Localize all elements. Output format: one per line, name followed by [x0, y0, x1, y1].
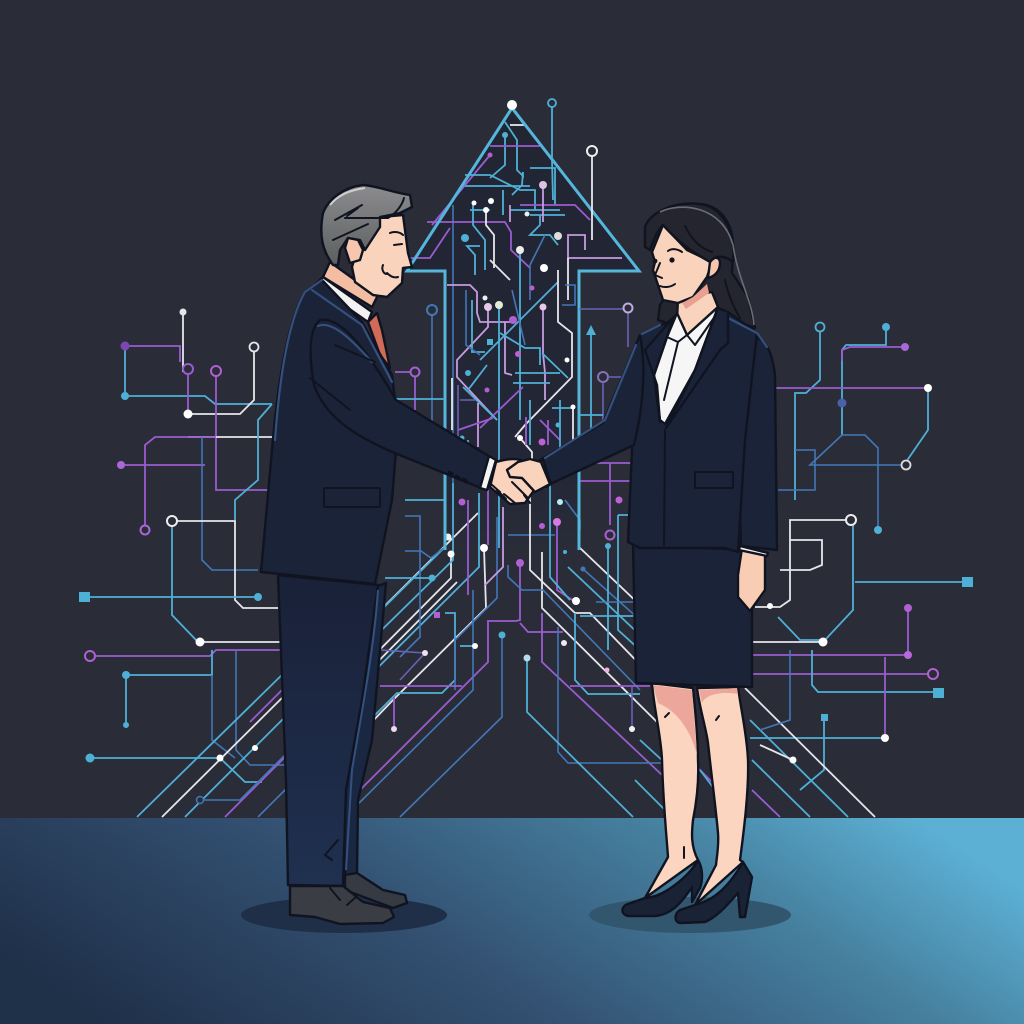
arrow interior fill	[408, 108, 638, 552]
man: back shoe	[345, 873, 407, 908]
man: pocket	[324, 488, 380, 507]
man: jacket	[261, 280, 398, 584]
woman: cuff left	[538, 460, 551, 487]
woman: face	[652, 225, 712, 303]
shadow: man	[241, 897, 447, 933]
man: trousers	[278, 575, 378, 886]
woman: left shoe	[622, 860, 702, 916]
floor	[0, 818, 1024, 1024]
nodes around the arrow	[395, 99, 632, 432]
man: tie	[368, 313, 390, 368]
man: sleeve	[311, 320, 492, 488]
man: front shoe	[290, 886, 394, 924]
woman: jacket	[628, 312, 757, 552]
circuit network: left side	[84, 312, 290, 817]
circuit nodes: left side	[79, 308, 262, 804]
woman: leg shadows	[653, 685, 738, 755]
woman: ear	[708, 258, 720, 278]
woman: skirt	[633, 545, 752, 687]
circuit network: lower chevrons	[290, 463, 720, 817]
woman: left leg	[645, 683, 698, 898]
woman: front hair	[645, 204, 733, 262]
arrow outline	[407, 108, 639, 550]
woman: left lapel	[645, 318, 673, 422]
figure: woman	[538, 204, 777, 923]
man: ear	[345, 238, 363, 263]
handshake	[490, 459, 550, 504]
woman: right lapel	[666, 308, 728, 428]
arrow tip node	[507, 100, 517, 110]
man: face	[352, 215, 412, 297]
man: cuff	[480, 456, 496, 490]
woman: shirt	[654, 307, 718, 424]
woman: right hand	[738, 548, 765, 611]
shadow: woman	[589, 897, 791, 933]
circuit nodes: lower chevrons	[391, 496, 635, 732]
circuit nodes: right side	[767, 322, 973, 764]
woman: sleeve right	[738, 335, 777, 550]
woman: right shoe	[676, 862, 752, 923]
figure: man	[261, 185, 496, 924]
circuit network: right side	[745, 331, 966, 817]
woman: back hair	[658, 204, 755, 328]
woman: neck	[677, 292, 718, 342]
woman: sleeve left	[540, 335, 643, 485]
man: neck	[323, 262, 378, 307]
background	[0, 0, 1024, 818]
arrow circuit nodes	[460, 132, 576, 446]
man: shirt collar	[315, 277, 372, 322]
woman: pocket	[695, 472, 733, 488]
man: back trouser leg	[340, 583, 386, 876]
arrow circuit traces	[410, 122, 622, 548]
man: hair	[321, 185, 412, 265]
woman: right leg	[695, 687, 748, 905]
woman: cuff	[739, 546, 768, 556]
